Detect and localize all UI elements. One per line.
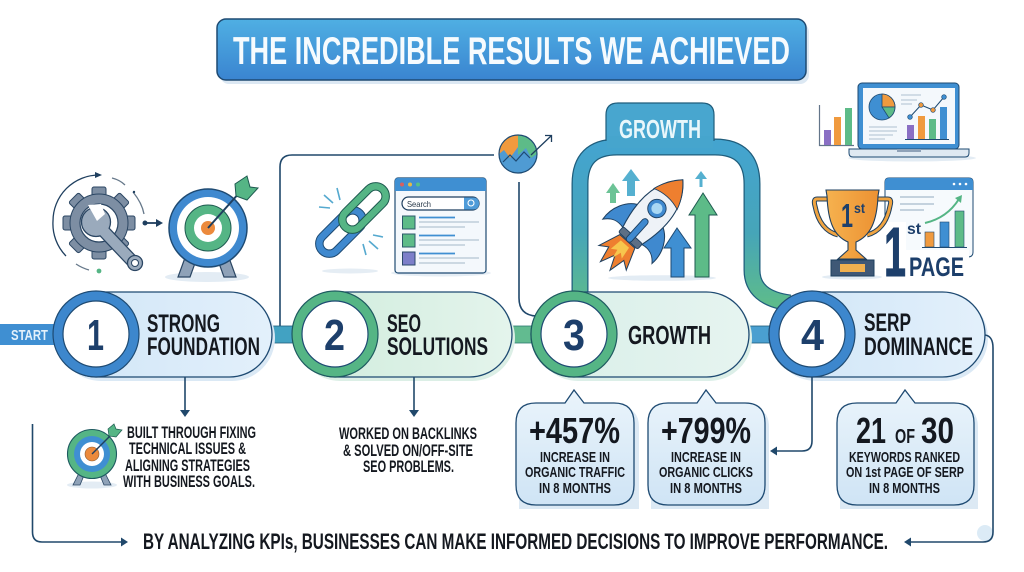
- connector line: chart icon to pill 3: [519, 182, 536, 316]
- callout: keywords ranked: IN 8 MONTHS: [869, 480, 940, 497]
- start tag: START: [11, 327, 48, 344]
- callout: organic traffic: [516, 390, 639, 509]
- callout: keywords ranked: ON 1st PAGE OF SERP: [846, 464, 964, 481]
- step 2 pill: 2: [324, 311, 345, 360]
- arrow: step 2 to description: [409, 377, 419, 417]
- text: step 1 description: [123, 424, 256, 491]
- arrow: left to conclusion: [32, 424, 128, 546]
- icon: growth arrows: [606, 169, 717, 277]
- step 1 pill: [53, 291, 275, 381]
- step 1 pill: 1: [87, 311, 104, 360]
- callout: organic traffic: IN 8 MONTHS: [539, 480, 611, 497]
- step 4 pill: DOMINANCE: [864, 333, 973, 361]
- callout: keywords ranked: 21: [856, 410, 886, 451]
- connector bars between pills: [270, 326, 772, 343]
- text: step 1 description: BUILT THROUGH FIXING: [127, 424, 256, 442]
- icon: analytics laptop: [848, 83, 976, 162]
- connector line: pill 1 to chart icon: [280, 155, 494, 326]
- callout: organic clicks: [648, 390, 769, 509]
- title banner: [217, 19, 809, 84]
- callout: organic clicks: IN 8 MONTHS: [670, 480, 742, 497]
- callout: keywords ranked: [837, 390, 978, 509]
- text: step 1 description: ALIGNING STRATEGIES: [125, 457, 250, 475]
- arrow: step 4 to conclusion: [904, 335, 993, 546]
- title banner: THE INCREDIBLE RESULTS WE ACHIEVED: [233, 30, 790, 73]
- icon: arrow gear to target: [142, 219, 163, 227]
- step 2 pill: SOLUTIONS: [387, 333, 488, 361]
- icon: first page window: 1: [884, 213, 906, 291]
- callout: keywords ranked: KEYWORDS RANKED: [849, 449, 960, 466]
- text: step 2 description: & SOLVED ON/OFF-SITE: [343, 442, 473, 460]
- icon: search browser window: Search: [407, 199, 431, 209]
- callout: keywords ranked: OF: [895, 426, 915, 448]
- callout: keywords ranked: 30: [921, 410, 954, 451]
- growth frame with tab: GROWTH: [619, 114, 701, 144]
- icon: chart globe: [499, 135, 552, 173]
- text: step 2 description: WORKED ON BACKLINKS: [339, 425, 477, 443]
- arrow: step 4 to callouts: [770, 377, 812, 456]
- step 2 pill: [292, 291, 515, 381]
- icon: chain links: [315, 182, 390, 274]
- step 4 pill: [769, 291, 988, 381]
- callout: organic traffic: ORGANIC TRAFFIC: [525, 464, 625, 481]
- step 2 pill: SEO: [387, 310, 421, 338]
- callout: organic clicks: +799%: [661, 410, 751, 451]
- icon: trophy: 1: [841, 197, 853, 234]
- callout: organic traffic: +457%: [529, 410, 620, 451]
- icon: first page window: st: [907, 221, 922, 238]
- step 4 pill: 4: [801, 311, 824, 360]
- icon: target with arrow: [165, 176, 258, 282]
- step 1 pill: FOUNDATION: [147, 333, 260, 361]
- start tag: [0, 324, 56, 345]
- step 3 pill: [531, 291, 752, 381]
- icon: small target: [67, 424, 122, 488]
- icon: bar chart: [820, 105, 854, 146]
- step 4 pill: SERP: [864, 309, 911, 337]
- text: step 1 description: WITH BUSINESS GOALS.: [123, 473, 255, 491]
- icon: search browser window: [391, 178, 491, 276]
- text: step 2 description: SEO PROBLEMS.: [363, 458, 454, 476]
- arrow: step 1 to description: [180, 377, 190, 417]
- step 3 pill: GROWTH: [628, 320, 711, 350]
- icon: rocket: [580, 157, 716, 288]
- text: step 1 description: TECHNICAL ISSUES &: [129, 440, 246, 458]
- callout: organic traffic: INCREASE IN: [540, 449, 610, 466]
- icon: first page window: PAGE: [909, 252, 964, 282]
- callout: organic clicks: ORGANIC CLICKS: [659, 464, 753, 481]
- step 3 pill: 3: [563, 311, 585, 360]
- icon: trophy: st: [854, 200, 865, 216]
- callout: organic clicks: INCREASE IN: [671, 449, 741, 466]
- growth frame with tab: [580, 103, 790, 303]
- icon: first page window: [882, 178, 973, 291]
- text: step 2 description: [339, 425, 477, 476]
- icon: trophy: [814, 190, 891, 280]
- icon: gear and wrench: [53, 172, 144, 273]
- step 1 pill: STRONG: [147, 310, 220, 338]
